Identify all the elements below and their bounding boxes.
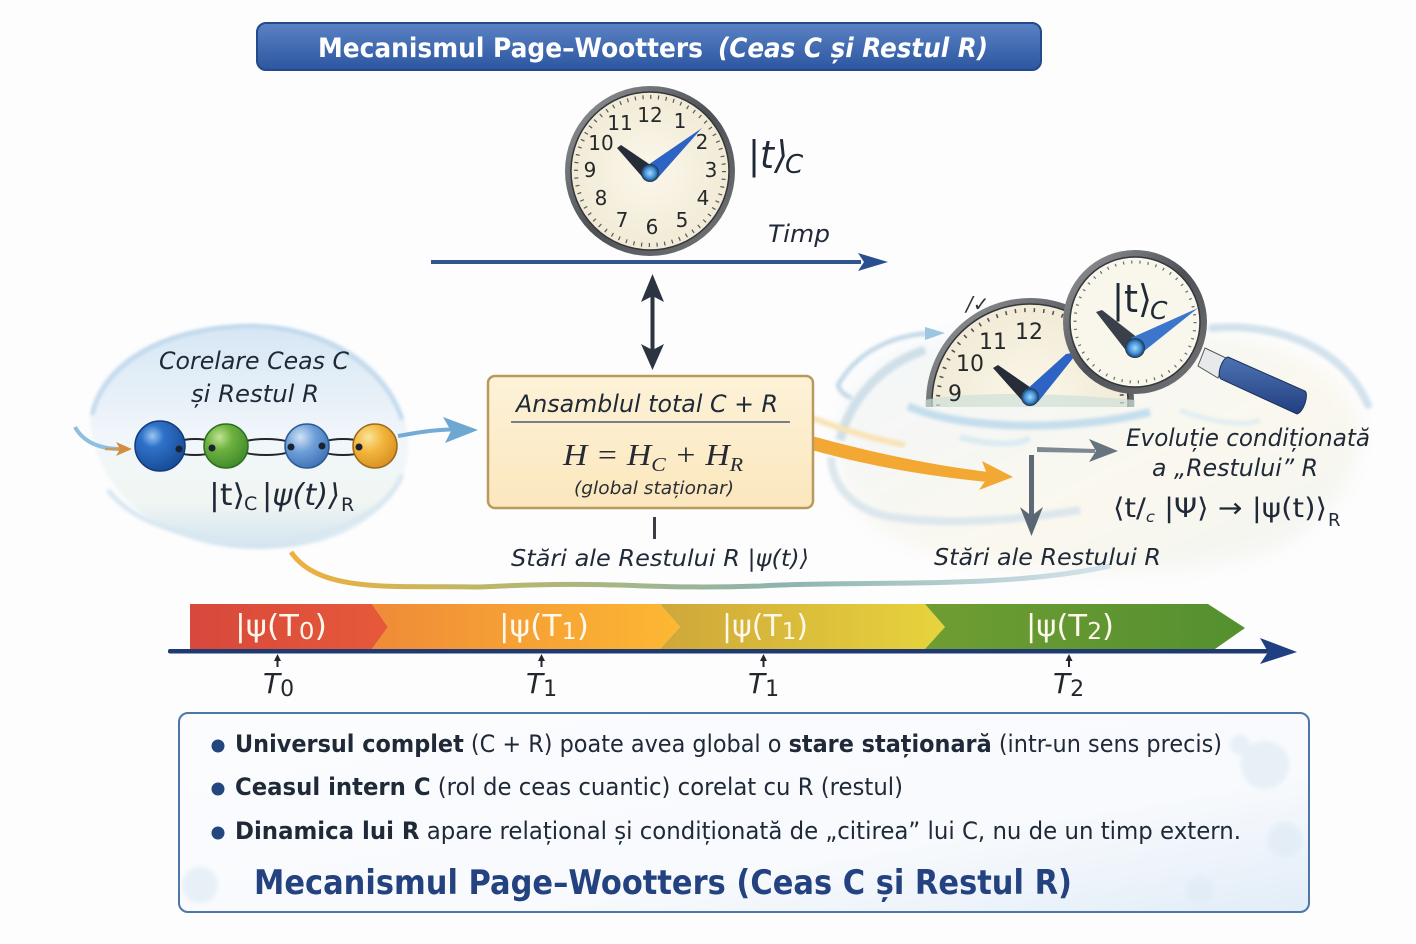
states label center: Stări ale Restului R |ψ(t)⟩ — [511, 546, 809, 572]
bubble formula: |ψ(t)⟩ — [262, 478, 340, 513]
Hamiltonian: C — [651, 454, 666, 476]
orange arrow — [812, 418, 1013, 490]
incoming arrow — [75, 427, 132, 456]
main clock: 2 — [696, 130, 708, 154]
system heading: Ansamblul total C + R — [514, 390, 778, 418]
main clock: 11 — [607, 111, 633, 135]
bubble formula: C — [244, 493, 257, 515]
clock state label: C — [785, 150, 804, 180]
magnifying glass — [1063, 250, 1306, 414]
grey arrow right — [1037, 439, 1118, 462]
main clock: 9 — [584, 158, 596, 182]
magnifying glass: C — [1150, 296, 1168, 325]
second clock in water: /✓ — [964, 292, 990, 316]
magnifying glass: |t⟩ — [1112, 277, 1152, 322]
main clock: 12 — [637, 103, 663, 127]
timeline state bands — [190, 604, 1245, 649]
timeline state bands: ) — [1102, 609, 1114, 644]
panel: right swirl background — [831, 327, 1368, 574]
second clock in water: 11 — [979, 330, 1007, 355]
bubble heading: Corelare Ceas C — [159, 347, 349, 375]
time label: Timp — [768, 220, 830, 248]
timeline state bands: |ψ(T — [722, 609, 782, 644]
timeline state bands: ) — [315, 609, 327, 644]
title banner: Mecanismul Page–Wootters — [318, 33, 703, 64]
main clock: 3 — [705, 158, 717, 182]
main clock — [565, 86, 735, 256]
clock state label: |t⟩ — [748, 133, 788, 178]
bubble formula — [209, 478, 354, 516]
second clock in water: 9 — [948, 382, 962, 407]
title banner: (Ceas C și Restul R) — [718, 33, 988, 64]
connector tick — [653, 517, 656, 539]
double arrow — [641, 274, 664, 370]
timeline ticks and labels: 0 — [280, 677, 294, 702]
summary heading: Mecanismul Page–Wootters (Ceas C și Restul R) — [254, 863, 1072, 903]
panel: total system — [488, 376, 813, 508]
bullet two: Ceasul intern C (rol de ceas cuantic) corelat cu R (restul) — [235, 773, 903, 801]
Hamiltonian: H = H — [563, 437, 644, 472]
states label right: Stări ale Restului R — [934, 545, 1161, 571]
main clock: 4 — [697, 186, 709, 210]
timeline state bands: ) — [577, 609, 589, 644]
timeline axis — [168, 638, 1297, 664]
conditional evolution text: |Ψ⟩ → |ψ(t)⟩ — [1155, 493, 1327, 524]
conditional evolution text: a „Restului” R — [1152, 454, 1318, 482]
timeline state bands: 2 — [1087, 619, 1102, 645]
main clock: 6 — [646, 215, 658, 239]
bubble heading — [159, 347, 349, 408]
timeline state bands: 1 — [562, 619, 577, 645]
conditional evolution text: Evoluție condiționată — [1126, 424, 1370, 452]
timeline ticks and labels: T — [1053, 667, 1070, 700]
timeline ticks and labels: T — [748, 667, 765, 700]
conditional evolution text: ⟨t/ — [1113, 493, 1143, 524]
conditional evolution text: R — [1328, 510, 1341, 531]
timeline state bands: ) — [796, 609, 808, 644]
timeline ticks and labels: 2 — [1070, 677, 1084, 702]
second clock in water: 12 — [1015, 320, 1043, 345]
bubble formula: |t⟩ — [209, 478, 245, 513]
main clock: 5 — [676, 208, 688, 232]
timeline ticks and labels: 1 — [543, 677, 557, 702]
timeline ticks and labels: T — [263, 667, 280, 700]
timeline state bands: 0 — [299, 619, 315, 645]
main clock: 1 — [674, 109, 686, 133]
timeline state bands: 1 — [782, 619, 796, 645]
second clock in water — [925, 296, 1135, 407]
timeline ticks and labels — [263, 654, 1084, 702]
stationary note: (global staționar) — [574, 478, 734, 499]
time axis arrow — [431, 253, 888, 271]
conditional evolution text — [1113, 424, 1370, 531]
bubble heading: și Restul R — [191, 380, 319, 408]
panel: correlation bubble — [90, 325, 408, 549]
grey arrow down — [1020, 455, 1043, 536]
arrow to total system — [398, 417, 478, 443]
title banner — [257, 23, 1041, 70]
chain of entangled spheres — [135, 421, 397, 471]
Hamiltonian: + H — [666, 437, 731, 472]
bullet three: Dinamica lui R apare relațional și condiționată de „citirea” lui C, nu de un timp extern. — [235, 817, 1241, 845]
second clock in water: 10 — [956, 352, 984, 377]
bullet one: Universul complet (C + R) poate avea global o stare staționară (intr-un sens precis) — [235, 730, 1222, 758]
panel: summary — [179, 713, 1309, 912]
conditional evolution text: c — [1146, 508, 1156, 526]
timeline state bands: |ψ(T — [235, 609, 295, 644]
main clock: 8 — [595, 186, 607, 210]
timeline state bands: |ψ(T — [1026, 609, 1086, 644]
swoosh from bubble — [291, 552, 1110, 587]
main clock: 10 — [588, 131, 614, 155]
bubble formula: R — [341, 494, 354, 516]
Hamiltonian: R — [729, 454, 743, 476]
timeline ticks and labels: 1 — [765, 677, 779, 702]
timeline state bands: |ψ(T — [499, 609, 559, 644]
timeline ticks and labels: T — [526, 667, 543, 700]
main clock: 7 — [616, 208, 628, 232]
